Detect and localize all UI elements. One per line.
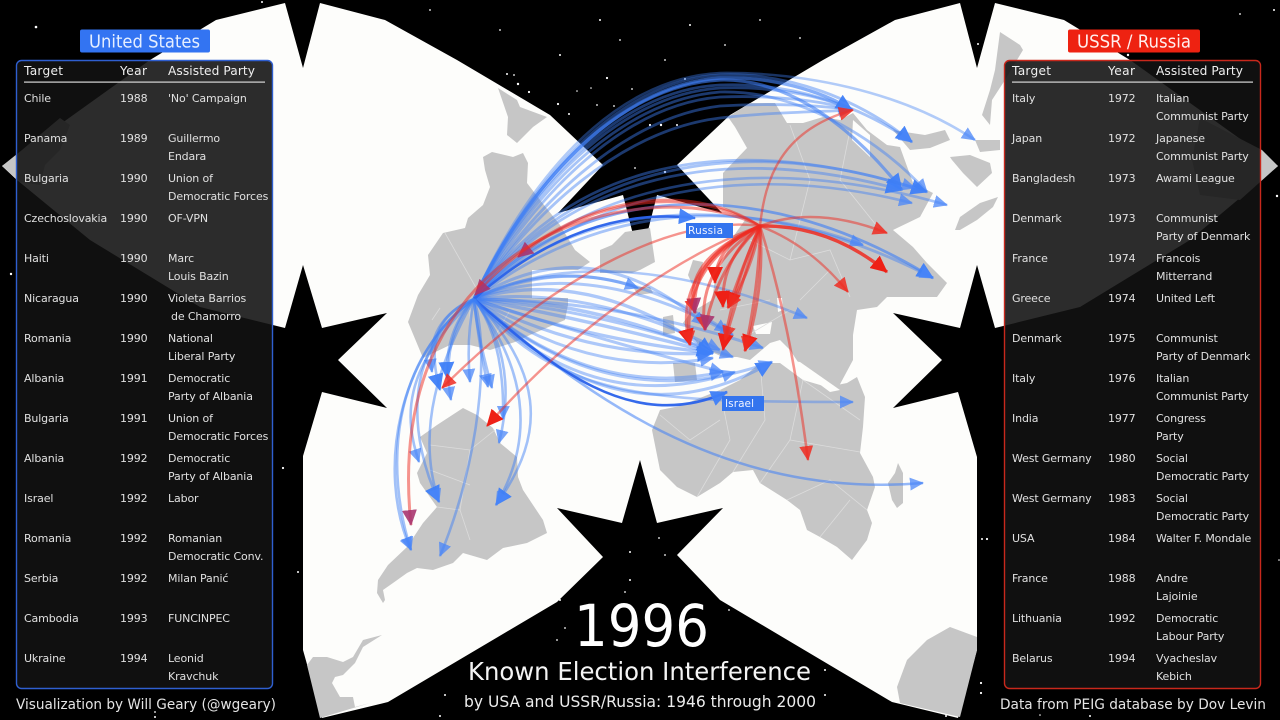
- table rows: Social: [1156, 452, 1188, 465]
- table rows: 1974: [1108, 252, 1136, 265]
- table rows: Belarus: [1012, 652, 1053, 665]
- table rows: 1977: [1108, 412, 1136, 425]
- table rows: 1990: [120, 172, 148, 185]
- arcs: USSR/Russia to Asia, Africa and the Americas: [409, 110, 887, 525]
- table header: Assisted Party: [1156, 64, 1243, 78]
- table rows: Bulgaria: [24, 172, 69, 185]
- credit: visualization: Visualization by Will Geary (@wgeary): [16, 697, 276, 713]
- table rows: Awami League: [1156, 172, 1235, 185]
- table rows: Democratic Conv.: [168, 550, 263, 563]
- table rows: 1993: [120, 612, 148, 625]
- table rows: 1988: [120, 92, 148, 105]
- panel: USSR / Russia: [1004, 30, 1260, 688]
- table rows: Democratic Party: [1156, 510, 1250, 523]
- table rows: Italian: [1156, 92, 1189, 105]
- table rows: 1972: [1108, 132, 1135, 145]
- table rows: 1974: [1108, 292, 1136, 305]
- table rows: 1990: [120, 252, 148, 265]
- table rows: 1990: [120, 292, 148, 305]
- table rows: France: [1012, 572, 1048, 585]
- header pill: United States: United States: [89, 32, 200, 52]
- table rows: Party of Denmark: [1156, 350, 1251, 363]
- table rows: Denmark: [1012, 332, 1062, 345]
- table rows: Vyacheslav: [1156, 652, 1218, 665]
- table rows: Endara: [168, 150, 206, 163]
- table rows: Leonid: [168, 652, 204, 665]
- table rows: 1990: [120, 212, 148, 225]
- table rows: Panama: [24, 132, 67, 145]
- table rows: Greece: [1012, 292, 1051, 305]
- table rows: 1973: [1108, 212, 1136, 225]
- table rows: [1011, 92, 1252, 683]
- table rows: Kebich: [1156, 670, 1192, 683]
- table header: Year: [119, 64, 148, 78]
- table rows: de Chamorro: [171, 310, 241, 323]
- table rows: Party of Albania: [168, 470, 253, 483]
- table rows: Romania: [24, 332, 71, 345]
- table rows: Czechoslovakia: [24, 212, 107, 225]
- table rows: 1973: [1108, 172, 1136, 185]
- table rows: India: [1012, 412, 1038, 425]
- table rows: 1984: [1108, 532, 1136, 545]
- table rows: Party: [1156, 430, 1184, 443]
- world map: seas and borders: [430, 120, 880, 540]
- table rows: Labor: [168, 492, 199, 505]
- table rows: Lajoinie: [1156, 590, 1198, 603]
- table rows: West Germany: [1012, 452, 1092, 465]
- table rows: Democratic Forces: [168, 190, 269, 203]
- table rows: Cambodia: [24, 612, 79, 625]
- subtitle: by USA and USSR/Russia: 1946 through 2000: [464, 692, 816, 711]
- table rows: Nicaragua: [24, 292, 79, 305]
- callout: Israel: Israel: [725, 398, 754, 410]
- table rows: Democratic: [168, 372, 230, 385]
- table rows: Communist Party: [1156, 390, 1249, 403]
- table rows: Italy: [1012, 92, 1036, 105]
- table rows: Romanian: [168, 532, 222, 545]
- table rows: 1976: [1108, 372, 1136, 385]
- table rows: Democratic: [1156, 612, 1218, 625]
- table rows: Marc: [168, 252, 194, 265]
- table rows: France: [1012, 252, 1048, 265]
- table rows: FUNCINPEC: [168, 612, 230, 625]
- table rows: 1980: [1108, 452, 1136, 465]
- arcs: USA to Europe, Middle East, Africa: [474, 216, 923, 485]
- table rows: 1991: [120, 412, 147, 425]
- table rows: Serbia: [24, 572, 58, 585]
- header pill: USSR / Russia: USSR / Russia: [1077, 32, 1191, 52]
- table rows: Francois: [1156, 252, 1201, 265]
- table rows: Mitterrand: [1156, 270, 1212, 283]
- table rows: 1992: [120, 492, 147, 505]
- table rows: Louis Bazin: [168, 270, 229, 283]
- table rows: Albania: [24, 452, 64, 465]
- title: Known Election Interference: Known Election Interference: [468, 657, 811, 686]
- table rows: Romania: [24, 532, 71, 545]
- arcs: USA far east: [474, 73, 975, 299]
- table rows: Japan: [1011, 132, 1042, 145]
- table rows: Communist Party: [1156, 150, 1249, 163]
- table rows: 1994: [120, 652, 148, 665]
- table rows: Communist: [1156, 212, 1219, 225]
- table rows: Communist Party: [1156, 110, 1249, 123]
- table rows: United Left: [1156, 292, 1216, 305]
- table rows: 'No' Campaign: [168, 92, 247, 105]
- table rows: Bulgaria: [24, 412, 69, 425]
- table rows: 1983: [1108, 492, 1136, 505]
- table rows: Kravchuk: [168, 670, 219, 683]
- table rows: Democratic: [168, 452, 230, 465]
- table rows: 1992: [120, 572, 147, 585]
- table rows: [24, 92, 269, 683]
- table rows: 1992: [120, 532, 147, 545]
- table rows: Walter F. Mondale: [1156, 532, 1252, 545]
- table rows: Union of: [168, 172, 214, 185]
- table rows: Milan Panić: [168, 572, 228, 585]
- table header: Target: [23, 64, 63, 78]
- table rows: 1992: [1108, 612, 1135, 625]
- title: year: 1996: [574, 592, 709, 660]
- table rows: OF-VPN: [168, 212, 208, 225]
- table rows: 1990: [120, 332, 148, 345]
- table header: [1011, 64, 1253, 83]
- table rows: Social: [1156, 492, 1188, 505]
- arcs: USA to Latin America: [395, 299, 531, 556]
- table rows: Party of Denmark: [1156, 230, 1251, 243]
- table rows: Bangladesh: [1012, 172, 1075, 185]
- arcs: USSR/Russia to Europe: [686, 226, 761, 351]
- table rows: 1991: [120, 372, 147, 385]
- panel: United States: [16, 30, 272, 688]
- table header: Year: [1107, 64, 1136, 78]
- callout: Israel: [722, 396, 764, 411]
- table rows: 1988: [1108, 572, 1136, 585]
- table rows: National: [168, 332, 213, 345]
- table header: Assisted Party: [168, 64, 255, 78]
- table rows: Japanese: [1155, 132, 1205, 145]
- table rows: West Germany: [1012, 492, 1092, 505]
- table rows: Ukraine: [24, 652, 66, 665]
- callout: Russia: Russia: [688, 225, 723, 237]
- table rows: Albania: [24, 372, 64, 385]
- table rows: USA: [1012, 532, 1035, 545]
- table rows: Liberal Party: [168, 350, 236, 363]
- table rows: Denmark: [1012, 212, 1062, 225]
- table header: [23, 64, 265, 83]
- table rows: Union of: [168, 412, 214, 425]
- table rows: Italy: [1012, 372, 1036, 385]
- table rows: Guillermo: [168, 132, 220, 145]
- table rows: Communist: [1156, 332, 1219, 345]
- table rows: Israel: [24, 492, 53, 505]
- table rows: Democratic Party: [1156, 470, 1250, 483]
- table rows: Haiti: [24, 252, 49, 265]
- table rows: Party of Albania: [168, 390, 253, 403]
- table rows: Labour Party: [1156, 630, 1225, 643]
- table rows: 1989: [120, 132, 148, 145]
- callout: Russia: [686, 223, 733, 238]
- table rows: Congress: [1156, 412, 1206, 425]
- table rows: 1975: [1108, 332, 1136, 345]
- table rows: 1992: [120, 452, 147, 465]
- table header: Target: [1011, 64, 1051, 78]
- table rows: Andre: [1156, 572, 1188, 585]
- table rows: Violeta Barrios: [168, 292, 247, 305]
- table rows: Democratic Forces: [168, 430, 269, 443]
- table rows: Chile: [24, 92, 51, 105]
- table rows: 1972: [1108, 92, 1135, 105]
- table rows: 1994: [1108, 652, 1136, 665]
- table rows: Lithuania: [1012, 612, 1062, 625]
- table rows: Italian: [1156, 372, 1189, 385]
- credit: data source: Data from PEIG database by Dov Levin: [1000, 697, 1266, 713]
